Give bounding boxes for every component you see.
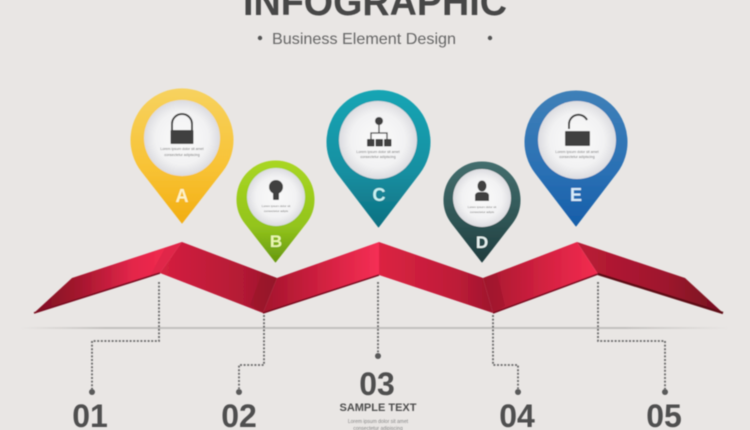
icon: person [475,180,489,201]
number 03 with caption: 03 [359,366,395,402]
icon: light bulb [269,180,283,200]
pin C [327,91,430,227]
pin B: B [270,232,282,251]
icon: org chart [367,117,392,146]
zigzag ribbon [34,242,723,313]
connector 04 [493,315,518,390]
pin B [237,161,314,262]
pin A: A [176,186,188,206]
pin A: Lorem ipsum dolor sit amet [160,147,204,151]
pin D [444,162,520,262]
pin D: consectetur adipis [470,210,495,214]
pin E: Lorem ipsum dolor sit amet [555,150,599,154]
connector 01 [92,282,159,390]
connector 03 [377,282,379,354]
pin C: Lorem ipsum dolor sit amet [356,150,400,154]
icon: open padlock [565,115,590,146]
pin E: E [570,185,582,205]
pin D: D [476,233,488,252]
pin E [525,91,627,226]
pin A [131,89,233,223]
connector 02 [239,315,264,390]
icon: padlock [170,114,194,144]
subtitle: Business Element Design [272,31,456,48]
pin B: consectetur adipis [264,209,289,213]
connector end dots [89,353,668,395]
baseline rule [20,327,730,329]
pin A: consectetur adipiscing [164,153,200,157]
number 03 with caption: Lorem ipsum dolor sit amet [348,419,409,425]
pin D: Lorem ipsum dolor sit [468,205,496,209]
pin E: consectetur adipiscing [559,155,595,159]
connector 05 [598,282,665,390]
pin C: consectetur adipiscing [360,155,396,159]
number 03 with caption [339,366,417,430]
pin C: C [372,185,386,205]
number 03 with caption: SAMPLE TEXT [339,402,417,414]
pin B: Lorem ipsum dolor sit [262,204,290,208]
